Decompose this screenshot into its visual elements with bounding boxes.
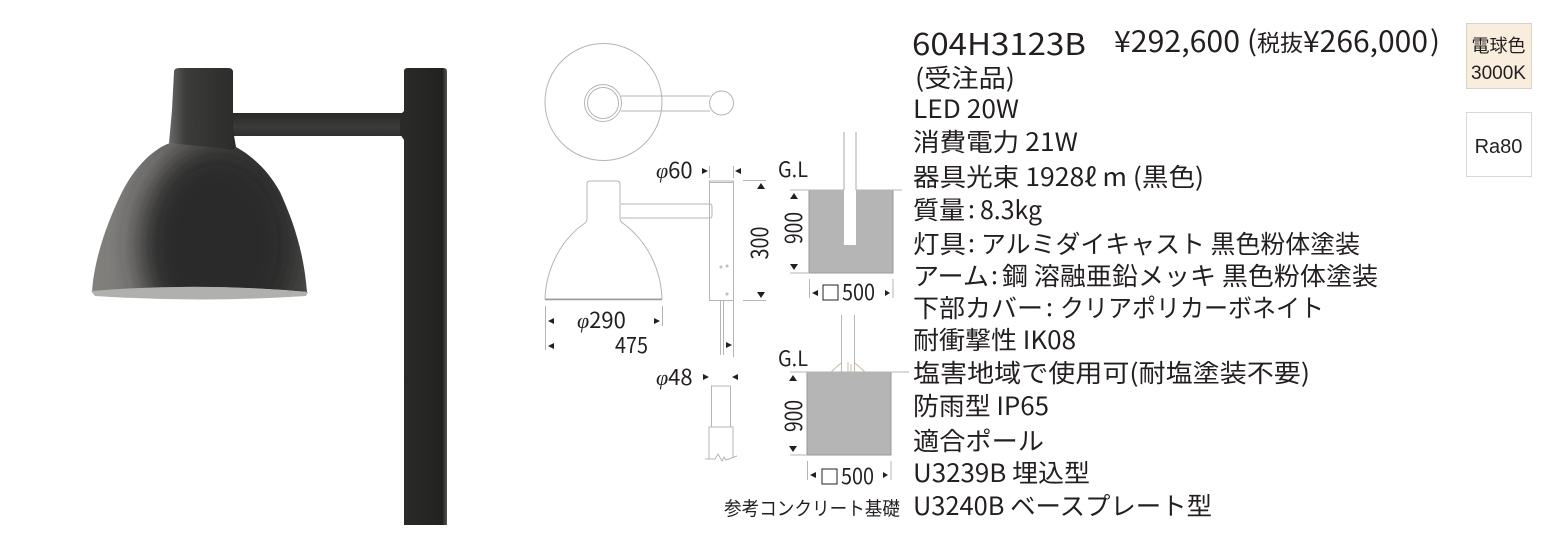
specification list: : xyxy=(991,256,998,292)
lamp glass cover xyxy=(91,287,308,300)
pole base drawing xyxy=(705,386,737,461)
product photo: black pole light xyxy=(85,68,447,525)
price: 税抜 xyxy=(1257,24,1303,58)
specification list: 器具光束 1928ℓ m (黒色) xyxy=(913,158,1204,194)
specification list: : xyxy=(1046,288,1053,324)
specification list: 8.3kg xyxy=(980,191,1042,227)
concrete foundation: buried type: 900 xyxy=(775,212,809,244)
specification list xyxy=(913,59,1378,523)
foundation caption: 参考コンクリート基礎 xyxy=(724,494,900,521)
specification list: U3239B 埋込型 xyxy=(913,454,1090,490)
specification list: : xyxy=(968,224,975,260)
specification list: 灯具 xyxy=(913,225,966,261)
price: ) xyxy=(1430,20,1440,60)
specification list: アルミダイキャスト 黒色粉体塗装 xyxy=(981,225,1360,261)
concrete foundation: buried type: 500 xyxy=(842,275,875,307)
specification list: 下部カバー xyxy=(913,289,1043,325)
side view drawing xyxy=(545,181,734,355)
price: ( xyxy=(1247,20,1257,60)
specification list: 質量 xyxy=(913,191,965,227)
dimension: width 475 xyxy=(548,328,732,360)
specification list: 防雨型 IP65 xyxy=(913,387,1049,423)
specification list: LED 20W xyxy=(913,90,1019,126)
specification list: 塩害地域で使用可(耐塩塗装不要) xyxy=(913,354,1310,390)
concrete foundation: base plate type: G.L xyxy=(778,343,808,373)
specification list: クリアポリカーボネイト xyxy=(1060,289,1324,325)
specification list: (受注品) xyxy=(915,59,1015,95)
badge: colour temperature: 3000K xyxy=(1471,63,1526,84)
top view drawing xyxy=(545,44,734,160)
dimension: phi 60: φ60 xyxy=(656,153,693,185)
specification list: 適合ポール xyxy=(913,422,1044,458)
dimension: height 300 xyxy=(741,180,775,300)
specification list: アーム xyxy=(913,257,989,293)
dimension: phi 48: φ48 xyxy=(656,360,693,392)
specification list: 消費電力 21W xyxy=(913,123,1078,159)
lamp arm xyxy=(232,113,407,136)
concrete foundation: base plate type: 900 xyxy=(775,400,809,432)
dimension: phi 48 xyxy=(656,360,738,392)
badge: colour temperature: 電球色 xyxy=(1472,32,1526,58)
concrete foundation: buried type: G.L xyxy=(778,154,808,184)
concrete foundation: base plate type xyxy=(775,315,909,491)
dimension: phi 60 xyxy=(656,153,741,185)
dimension: phi 290 xyxy=(546,300,734,357)
dimension: phi 290: φ290 xyxy=(577,303,626,335)
lamp pole xyxy=(400,68,447,525)
badge: colour temperature xyxy=(1466,24,1532,88)
dimension: width 475: 475 xyxy=(615,328,648,360)
lamp dome shade xyxy=(92,143,307,292)
price: ¥292,600 xyxy=(1114,19,1240,61)
price xyxy=(1114,19,1440,61)
specification list: 耐衝撃性 IK08 xyxy=(913,321,1076,357)
badge: colour rendering xyxy=(1466,112,1532,176)
dimension: height 300: 300 xyxy=(741,226,775,260)
specification list: 鋼 溶融亜鉛メッキ 黒色粉体塗装 xyxy=(1002,257,1378,293)
badge: colour rendering: Ra80 xyxy=(1475,136,1522,158)
specification list: U3240B ベースプレート型 xyxy=(913,487,1212,523)
concrete foundation: base plate type: 500 xyxy=(841,459,874,491)
lamp neck xyxy=(169,68,236,150)
specification list: : xyxy=(968,190,975,226)
concrete foundation: buried type xyxy=(775,132,902,307)
model number: 604H3123B xyxy=(912,20,1086,64)
price: ¥266,000 xyxy=(1303,19,1428,61)
